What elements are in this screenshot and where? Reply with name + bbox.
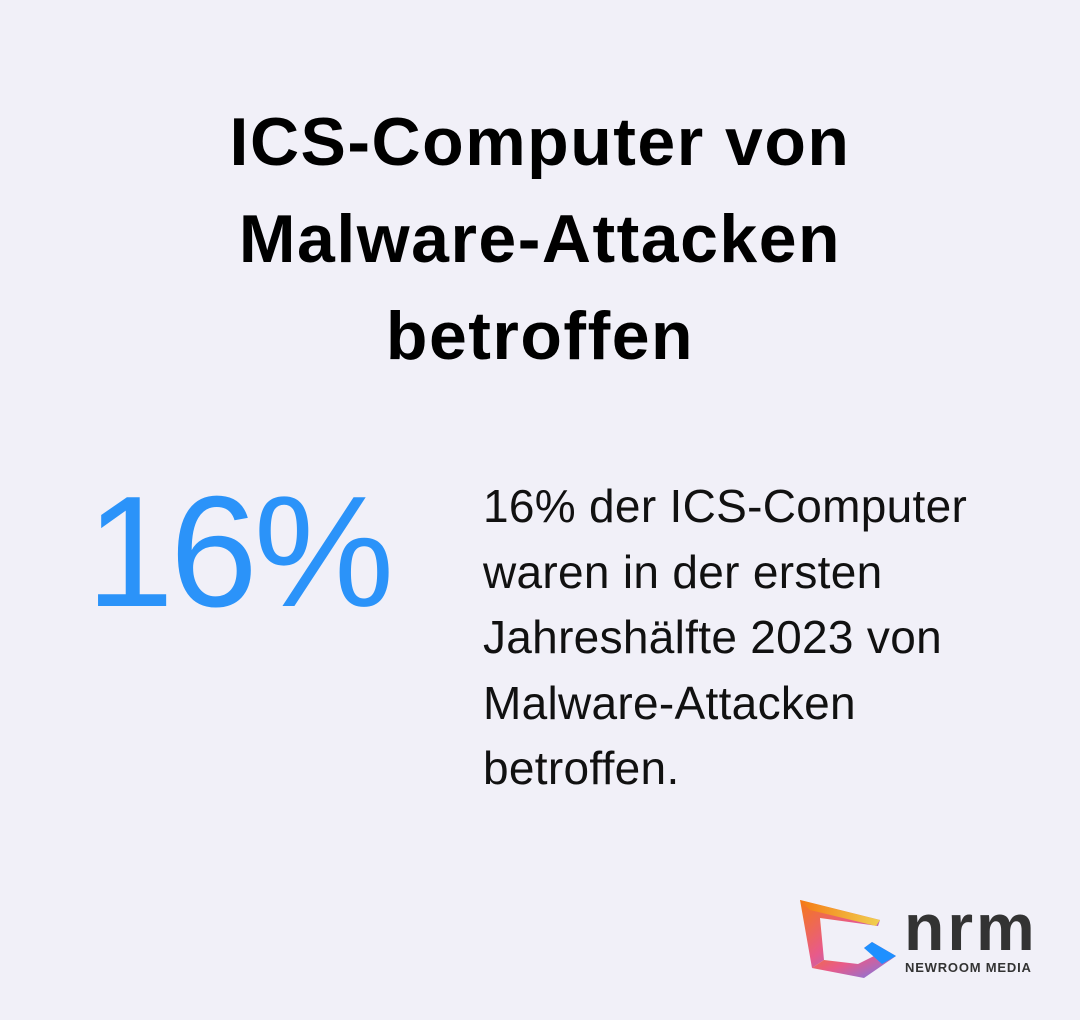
logo: NEWROOM MEDIA — [905, 960, 1032, 975]
title: betroffen — [386, 298, 694, 374]
logo text: nrm — [904, 890, 1038, 964]
title — [230, 104, 850, 374]
description text: betroffen. — [483, 742, 680, 794]
title: Malware-Attacken — [239, 201, 841, 277]
description text: Jahreshälfte 2023 von — [483, 611, 942, 663]
description text: 16% der ICS-Computer — [483, 480, 967, 532]
icon: nrm logo mark — [800, 900, 896, 978]
description text — [483, 480, 967, 794]
description text: Malware-Attacken — [483, 676, 856, 728]
title: ICS-Computer von — [230, 104, 850, 180]
logo — [800, 890, 1038, 978]
description text: waren in der ersten — [483, 546, 882, 598]
big stat: 16% — [86, 464, 390, 640]
